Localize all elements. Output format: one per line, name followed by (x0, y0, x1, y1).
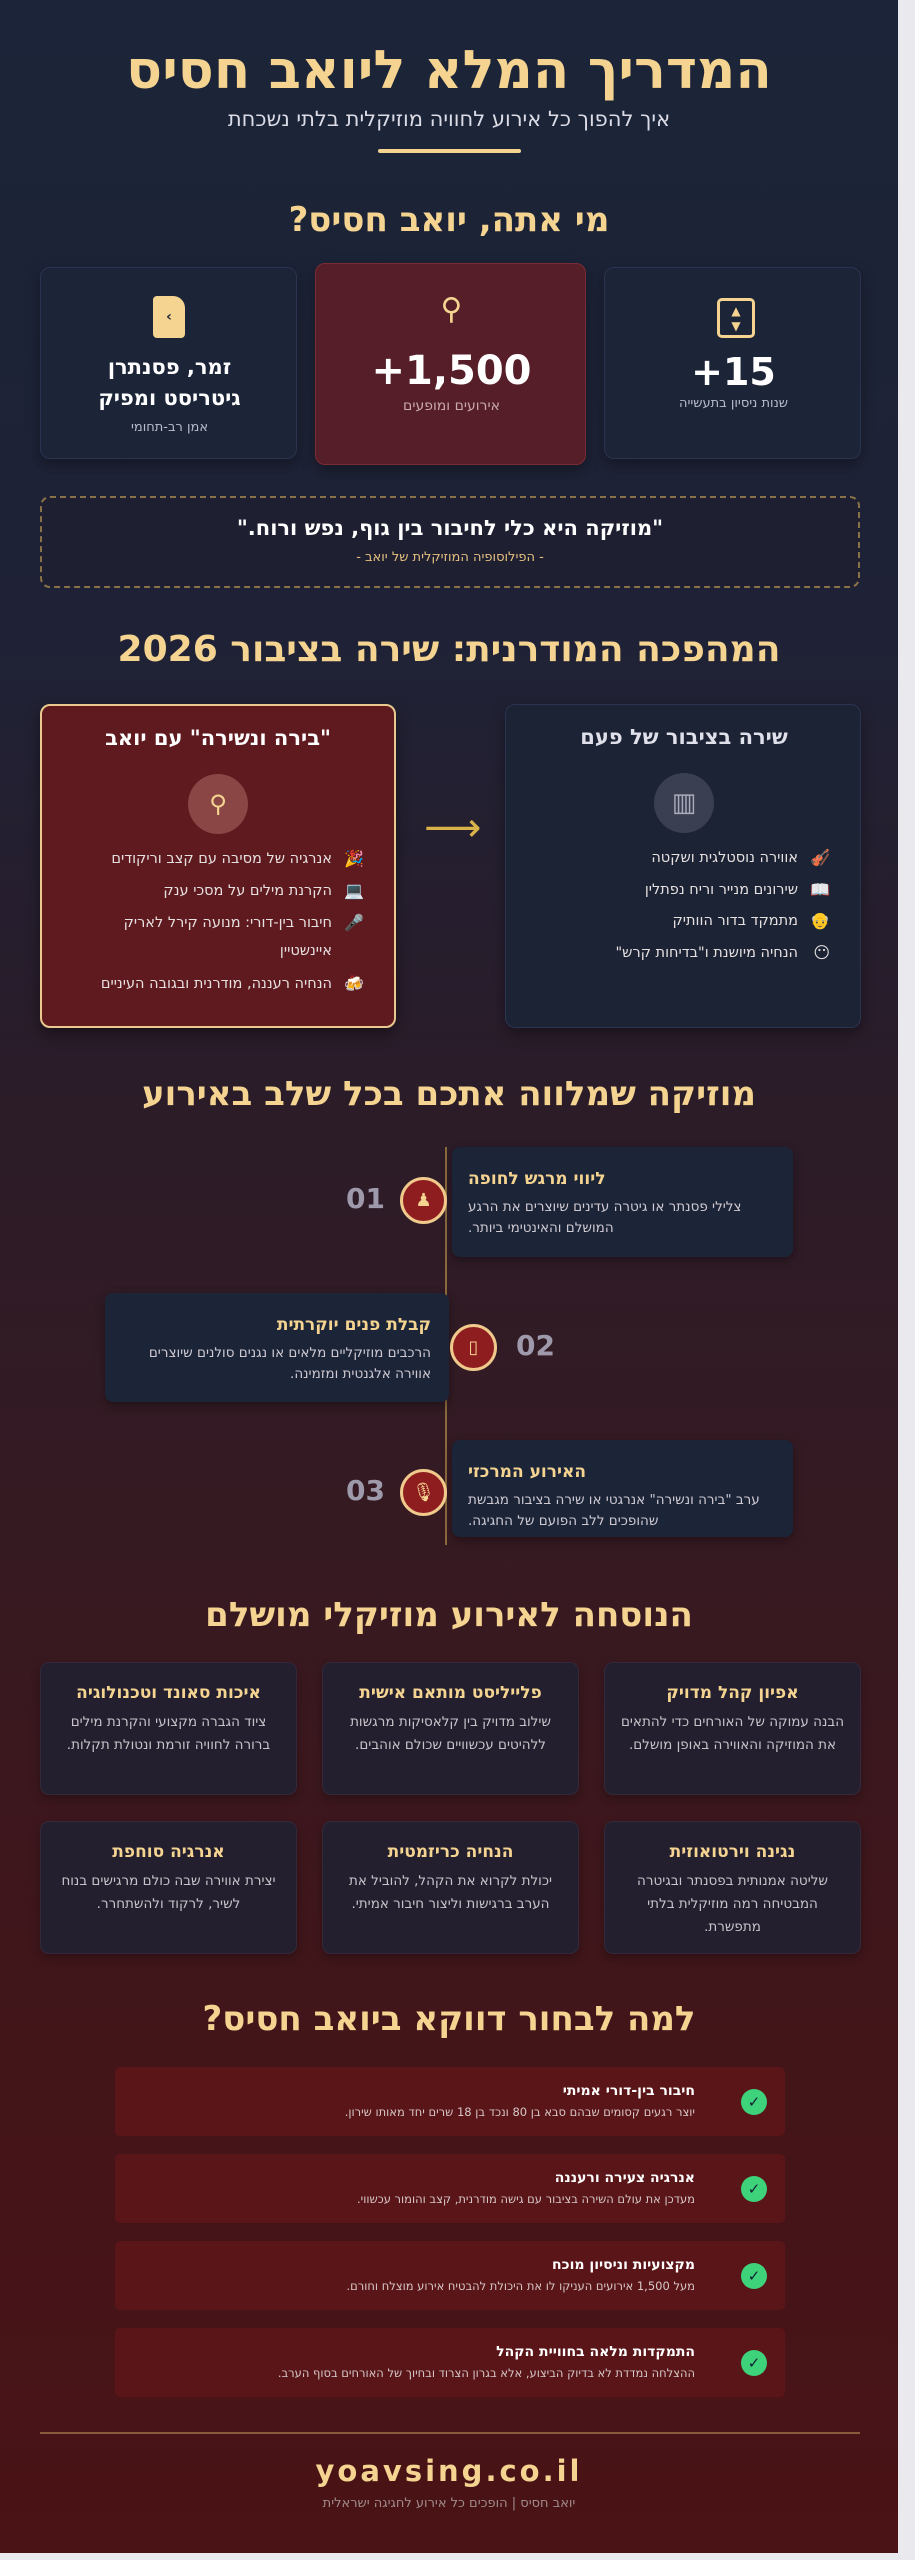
panel title: שירה בציבור של פעם (580, 725, 788, 749)
why list (115, 2067, 785, 2397)
step 2: קבלת פנים יוקרתית (277, 1315, 431, 1335)
panel: old style: מתמקד בדור הוותיק (672, 913, 798, 929)
feature: sound: איכות סאונד וטכנולוגיה (76, 1683, 261, 1703)
step 1 icon: ♟ (415, 1190, 432, 1211)
panel: new style: 🎤 (344, 913, 364, 932)
step 3: ערב "בירה ונשירה" אנרגטי או שירה בציבור מגבשת שהופכים ללב הפועם של החגיגה. (468, 1492, 760, 1529)
step 2 (105, 1293, 449, 1402)
reason 2: ✓ (748, 2180, 760, 2198)
list: old: אווירה נוסטלגית ושקטה (651, 850, 798, 866)
reason 4: ההצלחה נמדדת לא בדיוק הביצוע, אלא בגרון הצרוד ובחיוך של האורחים בסוף הערב. (278, 2366, 695, 2380)
step 2 icon: ▯ (469, 1337, 478, 1358)
subtitle: איך להפוך כל אירוע לחוויה מוזיקלית בלתי נשכחת (228, 107, 670, 131)
panel: new style: הקרנת מילים על מסכי ענק (163, 883, 332, 899)
step 1 icon (400, 1177, 447, 1224)
icon: box: ▼ (731, 319, 741, 333)
step 3 number: 03 (346, 1474, 385, 1507)
panel: old style: שירונים מנייר וריח נפתלין (645, 882, 798, 898)
step 1: ליווי מרגש לחופה (468, 1169, 606, 1189)
step 1 (452, 1147, 793, 1257)
role text (98, 355, 241, 410)
heading: why: למה לבחור דווקא ביואב חסיס? (202, 1999, 696, 2039)
panel: old style: 📖 (810, 880, 830, 899)
list: old: 🎻 (810, 848, 830, 867)
icon: old circle (654, 773, 714, 833)
feature: audience: הבנה עמוקה של האורחים כדי להתאים את המוזיקה והאווירה באופן מושלם. (621, 1714, 844, 1753)
stat card: experience (604, 267, 861, 459)
quote box (40, 496, 860, 588)
feature: virtuosity: נגינה וירטואוזית (670, 1842, 795, 1862)
step 3 icon: 🎙 (412, 1482, 435, 1503)
stat number: +15 (691, 350, 776, 394)
step 2 number: 02 (516, 1329, 555, 1362)
arrow: ⟶ (424, 805, 481, 851)
role text: זמר, פסנתרן (108, 355, 231, 379)
icon: medal: ⚲ (440, 292, 462, 327)
list: new: אנרגיה של מסיבה עם קצב וריקודים (111, 851, 332, 867)
feature: hosting (322, 1821, 579, 1954)
feature: energy: יצירת אווירה שבה כולם מרגישים בנוח לשיר, לרקוד ולהשתחרר. (61, 1873, 276, 1912)
feature: sound: ציוד הגברה מקצועי והקרנת מילים ברורה לחוויה זורמת ונטולת תקלות. (67, 1714, 270, 1753)
role label: אמן רב-תחומי (131, 420, 208, 435)
icon: old circle: ▥ (672, 788, 696, 818)
icon: file (153, 296, 185, 338)
heading: who are you: מי אתה, יואב חסיס? (289, 200, 609, 240)
panel: old style: 😶 (813, 943, 830, 962)
heading: revolution: המהפכה המודרנית: שירה בציבור 2026 (118, 629, 780, 670)
quote attribution: - הפילוסופיה המוזיקלית של יואב - (356, 550, 544, 565)
step 1 number: 01 (346, 1182, 385, 1215)
feature: playlist: פלייליסט מותאם אישית (359, 1683, 542, 1703)
footer: website: yoavsing.co.il (316, 2454, 582, 2488)
panel title: "בירה ונשירה" עם יואב (105, 726, 331, 750)
step 2: הרכבים מוזיקליים מלאים או נגנים סולנים שיוצרים אווירה אלגנטית ומזמינה. (149, 1345, 431, 1382)
stat card: artist (40, 267, 297, 459)
list: new: 🎉 (344, 849, 364, 868)
panel: new style: הנחיה רעננה, מודרנית ובגובה העיניים (101, 976, 332, 992)
role text: גיטריסט ומפיק (98, 386, 241, 410)
reason 2: אנרגיה צעירה ורעננה (555, 2170, 695, 2186)
reason 1: יוצר רגעים קסומים שבהם סבא בן 80 ונכד בן 18 שרים יחד מאותו שירון. (345, 2105, 695, 2119)
step 2 icon (450, 1324, 497, 1371)
timeline (104, 1147, 794, 1545)
title: המדריך המלא ליואב חסיס (126, 40, 772, 101)
panel: old style: 👴 (810, 911, 830, 930)
icon: medal circle (188, 774, 248, 834)
heading: timeline: מוזיקה שמלווה אתכם בכל שלב באירוע (142, 1074, 756, 1114)
panel: new style: 💻 (344, 881, 364, 900)
reason 2: מעדכן את עולם השירה בציבור עם גישה מודרנית, קצב והומור עכשווי. (357, 2192, 695, 2206)
reason 3: ✓ (748, 2267, 760, 2285)
step 1: צלילי פסנתר או גיטרה עדינים שיוצרים את הרגע המושלם והאינטימי ביותר. (468, 1199, 741, 1236)
title underline (378, 149, 521, 153)
feature: virtuosity (604, 1821, 861, 1954)
feature: virtuosity: שליטה אמנותית בפסנתר ובגיטרה המבטיחה רמה מוזיקלית בלתי מתפשרת. (637, 1873, 828, 1935)
feature: energy: אנרגיה סוחפת (112, 1842, 225, 1862)
reason 1 (115, 2067, 785, 2136)
reason 3: מקצועיות וניסיון מוכח (552, 2257, 695, 2273)
reason 3: מעל 1,500 אירועים העניקו לו את היכולת להבטיח אירוע מוצלח וחורם. (346, 2279, 695, 2293)
panel: old style (505, 704, 861, 1028)
reason 2 (115, 2154, 785, 2223)
reason 1: חיבור בין-דורי אמיתי (563, 2083, 695, 2099)
feature: energy (40, 1821, 297, 1954)
reason 1: ✓ (748, 2093, 760, 2111)
panel: new style: 🍻 (344, 974, 364, 993)
step 3 (452, 1440, 793, 1537)
reason 4: ✓ (748, 2354, 760, 2372)
reason 4 (115, 2328, 785, 2397)
icon: box (717, 298, 755, 338)
stat number: +1,500 (371, 348, 532, 394)
stat label: אירועים ומופעים (403, 398, 500, 414)
list: old (651, 848, 830, 867)
feature: hosting: יכולת לקרוא את הקהל, להוביל את הערב ברגישות וליצור חיבור אמיתי. (349, 1873, 552, 1912)
panel: new style (40, 704, 396, 1028)
panel: new style: חיבור בין-דורי: מנועה קירל לאריק איינשטיין (124, 915, 332, 959)
icon: box: ▲ (731, 304, 741, 318)
feature grid (39, 1662, 862, 1959)
feature: sound (40, 1662, 297, 1795)
stat card: events (315, 263, 586, 465)
feature: playlist (322, 1662, 579, 1795)
icon: medal circle: ⚲ (209, 790, 227, 818)
stat label: שנות ניסיון בתעשייה (679, 396, 788, 411)
feature: audience (604, 1662, 861, 1795)
step 3: האירוע המרכזי (468, 1462, 586, 1482)
feature: playlist: שילוב מדויק בין קלאסיקות מרגשות ללהיטים עכשוויים שכולם אוהבים. (350, 1714, 551, 1753)
icon: file: › (166, 309, 172, 325)
heading: formula: הנוסחה לאירוע מוזיקלי מושלם (205, 1595, 693, 1635)
feature: hosting: הנחיה כריזמטית (388, 1842, 513, 1862)
reason 4: התמקדות מלאה בחוויית הקהל (496, 2344, 695, 2360)
feature: audience: אפיון קהל מדויק (666, 1683, 799, 1703)
reason 3 (115, 2241, 785, 2310)
footer: tagline: יואב חסיס | הופכים כל אירוע לחגיגה ישראלית (323, 2496, 575, 2511)
panel: old style: הנחיה מיושנת ו"בדיחות קרש" (616, 945, 798, 961)
quote text: "מוזיקה היא כלי לחיבור בין גוף, נפש ורוח." (237, 516, 663, 540)
footer divider (40, 2432, 860, 2434)
step 3 icon (400, 1469, 447, 1516)
